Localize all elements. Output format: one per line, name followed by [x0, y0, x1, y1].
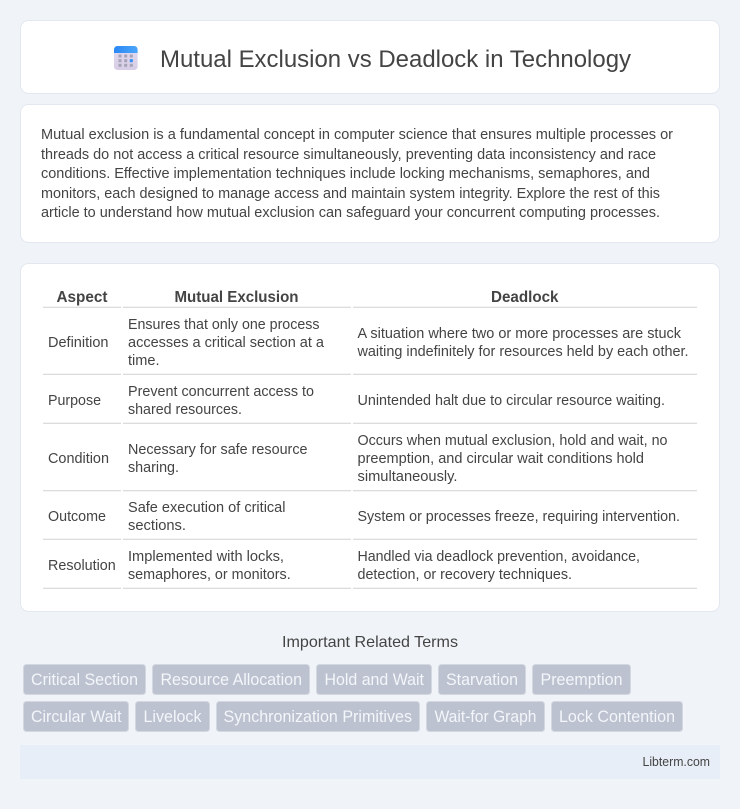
- chip: Circular Wait: Circular Wait: [31, 708, 122, 726]
- chip: Critical Section: [24, 664, 146, 694]
- table row: Condition: simultaneously.: [358, 469, 458, 485]
- text block: introduction paragraph: threads do not access a critical resource simultaneously, preventing data inconsistency and race: [41, 147, 656, 163]
- table row: Resolution: Handled via deadlock prevention, avoidance,: [358, 549, 640, 565]
- footer: Libterm.com: [642, 754, 710, 769]
- table row: Condition: Necessary for safe resource: [128, 442, 308, 458]
- panel: header: [20, 20, 720, 94]
- chip: Lock Contention: Lock Contention: [559, 708, 675, 726]
- chip: Resource Allocation: [152, 664, 310, 694]
- text block: introduction paragraph: monitors, each designed to manage access and maintain system integrity. Explore the rest of this: [41, 186, 660, 202]
- chip: Wait-for Graph: [426, 702, 544, 732]
- chip: Starvation: [438, 664, 526, 694]
- table header row: Mutual Exclusion: [174, 289, 298, 306]
- table row: Purpose: Prevent concurrent access to: [128, 384, 314, 400]
- heading: related terms: Important Related Terms: [282, 634, 458, 651]
- table row: Outcome: Outcome: [48, 509, 106, 525]
- table row: Purpose: shared resources.: [128, 402, 242, 418]
- icon: calendar: [114, 46, 138, 70]
- chip: Livelock: Livelock: [144, 708, 202, 726]
- text block: introduction paragraph: Mutual exclusion is a fundamental concept in computer science that ensures multiple processes or: [41, 127, 673, 143]
- chip: Preemption: Preemption: [540, 671, 622, 689]
- table row: Purpose: [43, 384, 697, 424]
- table row: Condition: sharing.: [128, 460, 179, 476]
- table row: Resolution: Implemented with locks,: [128, 549, 284, 565]
- table row: Definition: A situation where two or more processes are stuck: [358, 326, 682, 342]
- text block: introduction paragraph: conditions. Effective implementation techniques include locking mechanisms, semaphores, and: [41, 166, 650, 182]
- table row: Resolution: [43, 549, 697, 589]
- chip: Hold and Wait: [316, 664, 432, 694]
- table row: Definition: time.: [128, 353, 160, 369]
- title: Mutual Exclusion vs Deadlock in Technology: [160, 46, 632, 73]
- table header row: [43, 289, 697, 308]
- table row: Purpose: Purpose: [48, 393, 101, 409]
- table row: Definition: Definition: [48, 335, 108, 351]
- panel: introduction: [20, 104, 720, 242]
- footer: [20, 745, 720, 779]
- table row: Condition: [43, 433, 697, 491]
- table row: Outcome: System or processes freeze, requiring intervention.: [358, 509, 680, 525]
- table row: Outcome: sections.: [128, 518, 186, 534]
- table row: Resolution: detection, or recovery techniques.: [358, 567, 572, 583]
- table row: Purpose: Unintended halt due to circular resource waiting.: [358, 393, 665, 409]
- panel: related term chips: [24, 664, 682, 732]
- table row: Definition: [43, 317, 697, 375]
- chip: Synchronization Primitives: Synchronization Primitives: [224, 708, 412, 726]
- chip: Synchronization Primitives: [216, 702, 420, 732]
- table row: Resolution: Resolution: [48, 558, 116, 574]
- table header row: Aspect: [56, 289, 108, 306]
- table row: Condition: Condition: [48, 451, 109, 467]
- chip: Hold and Wait: Hold and Wait: [324, 671, 424, 689]
- chip: Starvation: Starvation: [446, 671, 518, 689]
- panel: comparison table: [20, 264, 720, 612]
- text block: introduction paragraph: article to understand how mutual exclusion can safeguard your concurrent computing processes.: [41, 205, 660, 221]
- table row: Condition: preemption, and circular wait conditions hold: [358, 451, 644, 467]
- chip: Circular Wait: [24, 702, 128, 732]
- chip: Critical Section: Critical Section: [31, 671, 138, 689]
- table row: Definition: waiting indefinitely for resources held by each other.: [356, 344, 688, 360]
- table row: Definition: accesses a critical section at a: [128, 335, 324, 351]
- chip: Livelock: [136, 702, 210, 732]
- table row: Outcome: Safe execution of critical: [128, 500, 286, 516]
- table row: Resolution: semaphores, or monitors.: [128, 567, 291, 583]
- chip: Lock Contention: [552, 702, 682, 732]
- table header row: Deadlock: [491, 289, 559, 306]
- chip: Preemption: [532, 664, 630, 694]
- table row: Outcome: [43, 500, 697, 540]
- chip: Wait-for Graph: Wait-for Graph: [434, 708, 536, 726]
- text block: introduction paragraph: [41, 127, 673, 221]
- table row: Definition: Ensures that only one process: [128, 317, 320, 333]
- table row: Condition: Occurs when mutual exclusion, hold and wait, no: [358, 433, 668, 449]
- chip: Resource Allocation: Resource Allocation: [160, 671, 302, 689]
